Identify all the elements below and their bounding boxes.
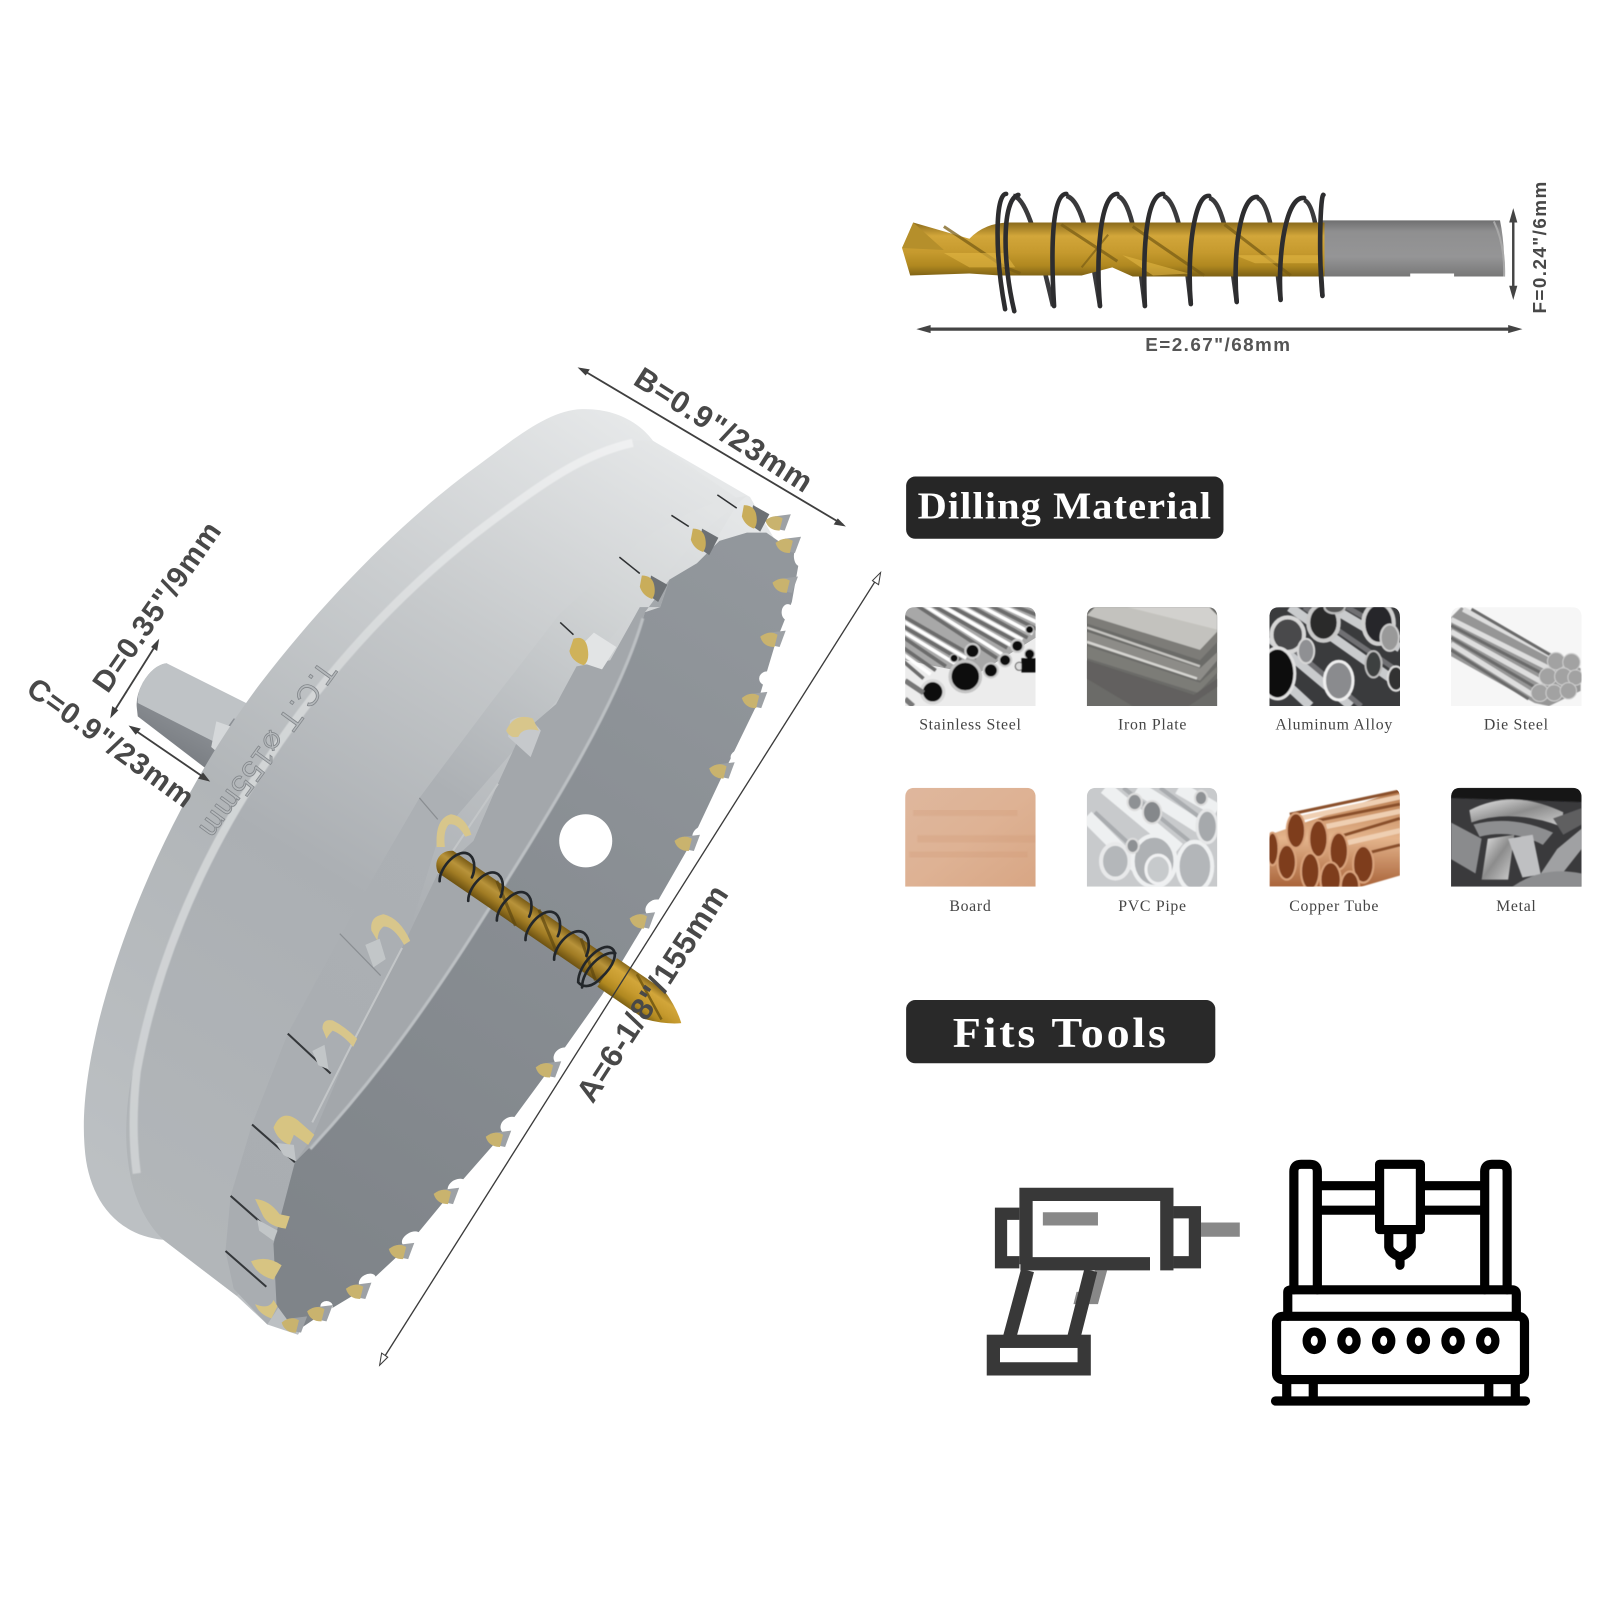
panel: drill bit with spring [902, 180, 1550, 355]
cutter body silhouette [84, 409, 776, 1335]
material: PVC Pipe [1087, 788, 1217, 915]
label: Board [949, 898, 992, 915]
carbide teeth, stepped inner edge [226, 495, 769, 1318]
panel: hole saw product photo [84, 409, 806, 1335]
material: Die Steel [1451, 607, 1583, 734]
heading: Fits Tools: Fits Tools [953, 1010, 1169, 1056]
heading: Fits Tools [906, 1000, 1215, 1063]
inner side wall [295, 580, 669, 1162]
spring front strands [998, 194, 1323, 311]
flange highlight line [134, 443, 633, 1173]
arbor shank [137, 663, 260, 777]
material: Iron Plate [1087, 607, 1217, 734]
stepped rim band [226, 496, 747, 1324]
label: Aluminum Alloy [1275, 717, 1393, 734]
material: Metal [1451, 788, 1582, 915]
dimension B: B=0.9"/23mm [628, 361, 819, 500]
spring back strands [1013, 196, 1322, 306]
step line on inner wall [312, 784, 498, 1122]
rim gullets [320, 546, 806, 1311]
dimension D: D=0.35"/9mm [86, 515, 229, 698]
dimension E: E=2.67"/68mm [1145, 334, 1291, 355]
dimension C: C=0.9"/23mm [21, 672, 201, 815]
label: PVC Pipe [1118, 898, 1187, 915]
dimension A [380, 572, 881, 1365]
material: Aluminum Alloy [1269, 607, 1400, 733]
material: Copper Tube [1266, 788, 1400, 915]
interior of cutter [273, 533, 800, 1332]
engraved size text: T.C.T ⌀155mm [192, 655, 342, 845]
mounting hole [559, 814, 612, 867]
gold fluted body [902, 222, 1324, 277]
dimension E [916, 325, 1522, 355]
dimension F [1509, 180, 1550, 314]
dimension B [578, 361, 846, 527]
carbide teeth, outer edge [282, 514, 801, 1333]
icon: electric drill [993, 1194, 1240, 1369]
central pilot drill bit with spring [424, 839, 694, 1045]
icon: CNC machine [1276, 1164, 1526, 1401]
label: Metal [1496, 898, 1537, 915]
dimension A: A=6-1/8"/155mm [569, 878, 736, 1108]
heading: Dilling Material [906, 477, 1223, 539]
grey shank [1321, 220, 1504, 277]
crescent highlight [310, 618, 643, 1149]
label: Iron Plate [1118, 717, 1187, 734]
label: Copper Tube [1289, 898, 1379, 915]
cylinder wall [126, 440, 740, 1296]
heading: Dilling Material: Dilling Material [918, 486, 1212, 527]
material: Board [905, 788, 1036, 915]
label: Die Steel [1484, 717, 1549, 734]
label: Stainless Steel [919, 717, 1022, 734]
dimension F: F=0.24"/6mm [1529, 180, 1550, 314]
material: Stainless Steel [905, 607, 1036, 730]
